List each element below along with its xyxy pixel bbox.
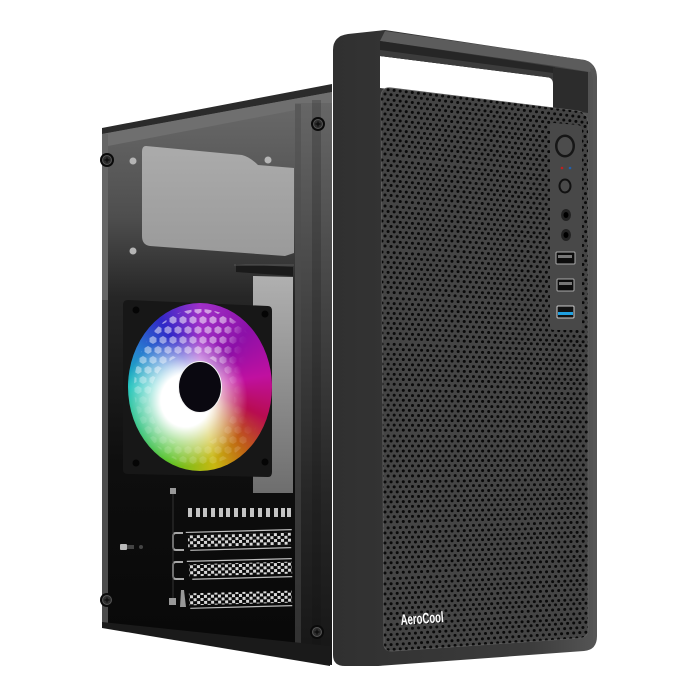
panel: front frame and handle <box>333 30 597 666</box>
screw bottom right <box>310 625 324 639</box>
psu shroud window <box>142 146 294 256</box>
back panel window <box>253 276 293 493</box>
handle top face <box>380 31 597 640</box>
screw top left <box>100 153 114 167</box>
PC case product illustration <box>100 30 597 666</box>
panel: front io controls <box>550 123 582 330</box>
led indicators <box>561 167 571 169</box>
panel: glass side of case <box>102 84 332 666</box>
screw bottom left <box>100 593 114 607</box>
hub <box>178 362 222 412</box>
usb port 1 <box>556 252 575 264</box>
reset button <box>558 178 572 194</box>
headphone jack <box>561 209 571 221</box>
usb port 2 <box>557 279 574 291</box>
microphone jack <box>561 229 571 241</box>
panel: mesh front <box>381 88 590 651</box>
rainbow blades <box>128 303 272 471</box>
slot covers <box>186 530 292 608</box>
slot brackets <box>173 533 184 579</box>
mounting holes <box>130 156 272 254</box>
motherboard tray bracket <box>234 264 294 276</box>
slot rail <box>169 488 186 607</box>
rgb fan <box>128 303 272 471</box>
fan frame <box>123 300 272 477</box>
standoff pin <box>120 544 143 550</box>
expansion area <box>120 488 292 608</box>
power button <box>555 134 575 158</box>
hex grille <box>134 309 250 464</box>
vent squares <box>188 508 291 517</box>
mesh holes <box>382 89 590 650</box>
logo: AeroCool: AeroCool <box>400 609 444 629</box>
screw top right <box>311 117 325 131</box>
usb 3 port <box>557 306 574 318</box>
